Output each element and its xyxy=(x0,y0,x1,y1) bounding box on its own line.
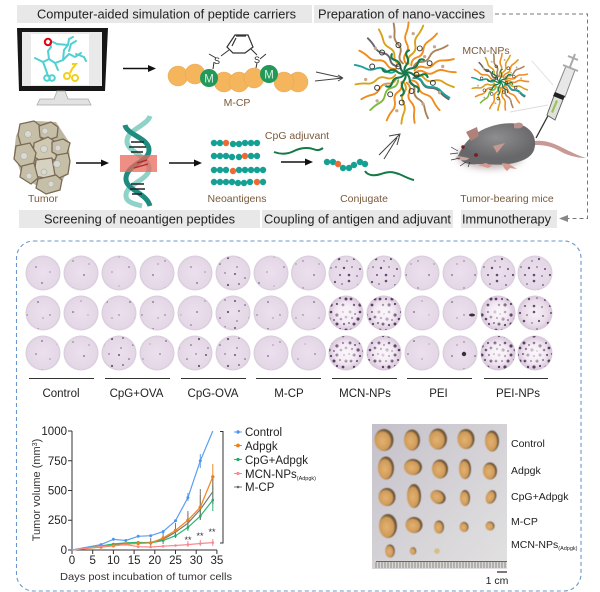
well group labels: PEI-NPs xyxy=(496,388,540,400)
icon: DNA helix with highlight xyxy=(120,116,157,206)
tumors xyxy=(374,428,499,558)
error bars xyxy=(188,454,200,501)
wells: CpG+OVA xyxy=(102,256,174,370)
label: MCN-NPs: MCN-NPs xyxy=(462,45,510,57)
tumor photo row labels: (Adpgk) xyxy=(558,546,578,552)
series: M-CP xyxy=(72,492,213,550)
tumor photo row labels: MCN-NPs xyxy=(511,539,558,551)
dashed arrow: nano-vaccines to immunotherapy xyxy=(495,14,588,222)
M-CP peptide structure: S xyxy=(254,55,260,65)
nanoparticle small xyxy=(472,53,529,111)
hollow arrow: conjugate to particle xyxy=(379,134,400,159)
x axis title: Days post incubation of tumor cells xyxy=(60,571,232,583)
ELISpot well grid xyxy=(26,256,552,370)
y axis title: Tumor volume (mm xyxy=(31,446,43,541)
icon: computer monitor with molecule xyxy=(17,28,108,105)
wells: MCN-NPs xyxy=(328,256,402,370)
series: MCN-NPs xyxy=(72,541,214,550)
tumor photo row labels: Adpgk xyxy=(511,465,542,477)
M-CP peptide structure: S xyxy=(214,56,220,66)
well group labels: MCN-NPs xyxy=(339,388,391,400)
label: M-CP: M-CP xyxy=(224,97,250,109)
heading: coupling of antigen and adjuvant: Coupling of antigen and adjuvant xyxy=(264,212,452,226)
x axis labels: 30 xyxy=(190,555,203,567)
M-CP peptide structure: M xyxy=(204,74,214,86)
wells: CpG-OVA xyxy=(178,256,250,370)
x axis labels: 20 xyxy=(148,555,161,567)
chart legend: Control xyxy=(245,427,282,439)
series: Adpgk xyxy=(72,475,214,550)
nanoparticle large xyxy=(354,22,456,124)
M-CP peptide structure: M xyxy=(264,70,274,82)
series: CpG+Adpgk xyxy=(72,499,214,550)
x axis labels: 0 xyxy=(69,555,75,567)
well group labels: CpG-OVA xyxy=(188,388,239,400)
chart legend xyxy=(234,427,316,494)
label: Tumor: Tumor xyxy=(28,193,58,205)
x axis labels: 35 xyxy=(211,555,223,567)
label: CpG adjuvant: CpG adjuvant xyxy=(265,130,329,142)
chart legend: MCN-NPs xyxy=(245,469,297,481)
tumor photo row labels: Control xyxy=(511,438,545,450)
heading: computer-aided simulation xyxy=(17,5,312,23)
x axis labels xyxy=(69,555,223,567)
icon: syringe xyxy=(510,54,578,138)
chart legend: CpG+Adpgk xyxy=(245,455,308,467)
y axis title: ) xyxy=(31,439,43,442)
wells: PEI xyxy=(404,256,478,370)
icon: mouse xyxy=(450,123,586,171)
x axis labels: 25 xyxy=(169,555,182,567)
chart legend: Adpgk xyxy=(245,441,278,453)
wells: PEI-NPs xyxy=(480,256,552,370)
well group labels: CpG+OVA xyxy=(110,388,164,400)
y axis title: 3 xyxy=(32,442,39,446)
arrow: tumor to DNA xyxy=(76,160,109,166)
conjugate molecule xyxy=(324,159,414,180)
line chart: tumor volume xyxy=(31,426,316,583)
axes xyxy=(68,431,217,554)
well group labels xyxy=(29,378,548,400)
label: Tumor-bearing mice: Tumor-bearing mice xyxy=(460,193,554,205)
label: Neoantigens: Neoantigens xyxy=(208,193,266,205)
heading: computer-aided simulation: Computer-aided simulation of peptide carriers xyxy=(37,8,296,22)
label: Conjugate: Conjugate xyxy=(340,193,388,205)
well group labels: Control xyxy=(42,388,80,400)
x axis labels: 15 xyxy=(128,555,140,567)
arrow: adjuvant to conjugate xyxy=(281,158,313,166)
y axis labels: 0 xyxy=(61,545,67,557)
tumor photo row labels xyxy=(511,438,578,552)
well group labels: PEI xyxy=(429,388,448,400)
significance markers: ** xyxy=(208,527,216,537)
significance markers xyxy=(184,527,216,545)
CpG strand xyxy=(274,148,323,154)
wells: M-CP xyxy=(254,256,326,370)
y axis labels: 250 xyxy=(48,515,67,527)
ruler xyxy=(375,561,507,568)
x axis labels: 5 xyxy=(89,555,96,567)
icon: tumor cells xyxy=(14,121,70,194)
tumor photo row labels: CpG+Adpgk xyxy=(511,491,569,503)
heading: screening of neoantigen peptides xyxy=(19,210,260,228)
chart legend: M-CP xyxy=(245,482,275,494)
chart legend: (Adpgk) xyxy=(297,476,316,482)
significance markers: ** xyxy=(184,535,192,545)
M-CP peptide structure xyxy=(168,35,308,92)
scale bar: 1 cm xyxy=(486,575,509,587)
arrow: DNA to neoantigens xyxy=(169,160,202,166)
tumor photo row labels: M-CP xyxy=(511,516,538,528)
heading: immunotherapy: Immunotherapy xyxy=(462,212,552,226)
significance markers: ** xyxy=(196,531,204,541)
photo: excised tumors xyxy=(372,424,507,569)
y axis labels: 500 xyxy=(48,486,67,498)
hollow arrow: M-CP to particle xyxy=(315,72,343,81)
y axis labels: 1000 xyxy=(41,426,67,438)
y axis labels xyxy=(41,426,67,557)
heading: preparation of nano-vaccines: Preparation of nano-vaccines xyxy=(318,8,485,22)
x axis labels: 10 xyxy=(107,555,120,567)
well group labels: M-CP xyxy=(274,388,304,400)
heading: screening of neoantigen peptides: Screening of neoantigen peptides xyxy=(44,212,235,226)
arrow: monitor to M-CP xyxy=(123,65,156,72)
series: Control xyxy=(70,431,213,552)
wells: Control xyxy=(26,256,98,370)
y axis labels: 750 xyxy=(48,456,67,468)
panel: results xyxy=(16,241,581,591)
significance bracket xyxy=(220,432,223,543)
neoantigen bead rows xyxy=(211,140,266,186)
